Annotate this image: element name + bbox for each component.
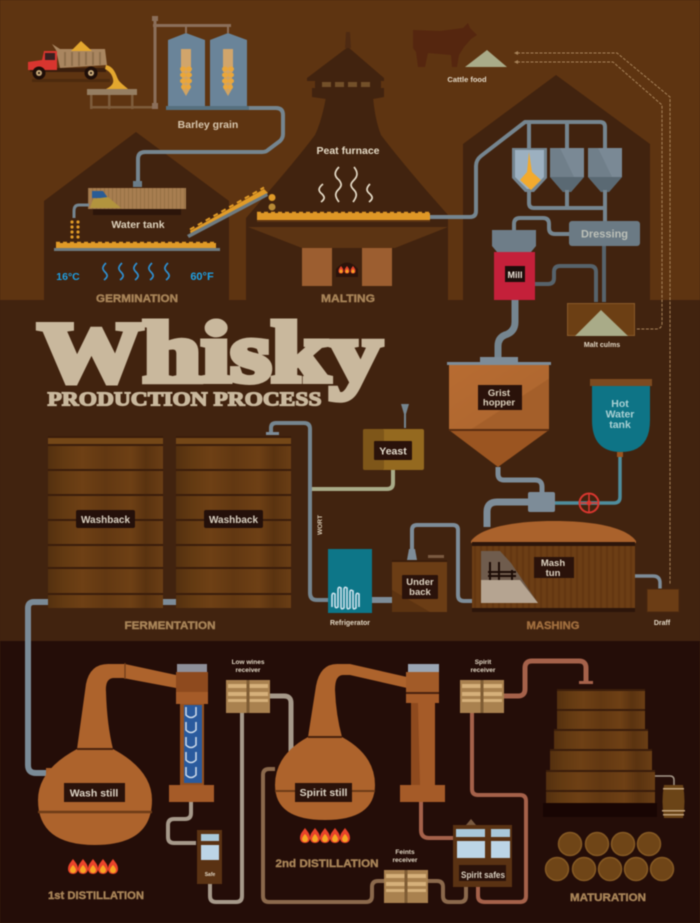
wheat icon [222,49,234,96]
dressing machine [569,221,640,246]
dressing machine: Dressing [581,228,628,240]
washback: right [176,436,291,608]
pipe: mash tun to draff [635,576,660,590]
germination heading: GERMINATION [96,293,178,305]
rear wheel [84,66,98,80]
hopper: active [512,148,547,192]
pipe: grist hopper to junction [498,467,542,493]
gap pillar between buildings [231,205,246,300]
pipe: mash tun to underback [412,525,473,601]
spirit receiver [460,680,504,713]
tank shadow [93,209,181,215]
smoke [319,167,372,202]
yeast tank [363,404,424,470]
grain pouring from truck [105,65,128,89]
pipe: spirit safes to spirit receiver [472,713,526,902]
maturation heading: MATURATION [570,892,646,904]
mashing heading: MASHING [526,620,580,632]
background: upper section [0,0,700,300]
spirit still [275,664,407,820]
pipe: spirit still to feints [263,769,384,902]
pipe: dressing to malt culms [602,246,606,302]
cab window [45,53,55,60]
pipe: mill to grist hopper [498,300,515,358]
feints receiver label: Feints [395,849,415,856]
draff label: Draff [654,620,671,627]
pipe: low wines to spirit still [270,696,291,752]
wheat icon [180,49,192,96]
falling grain [70,220,80,239]
tank nozzle [133,181,142,187]
spirit receiver label: Spirit [475,659,492,666]
malting building [246,32,448,300]
draff box [647,589,679,612]
furnace fire [336,262,358,277]
mill [492,230,536,300]
pagoda lower eave [312,88,384,99]
germination conveyor [54,242,220,251]
spirit safes: Spirit safes [461,870,505,880]
refrigerator [328,549,372,613]
hot water tank: tank [609,419,631,431]
silo base [166,106,249,110]
low wines receiver label [232,659,265,674]
dashed lines to cattle food [517,53,670,585]
grain dots [268,194,276,210]
hopper: right [588,148,622,192]
condenser: first [169,664,214,802]
pipe: wort to washback [271,423,328,600]
underback: Under [406,577,434,588]
cooling coil [332,587,359,609]
grain in tank [90,197,121,208]
pipe: spirit receiver to vat [504,661,586,696]
temperature: fahrenheit: 60°F [190,271,214,283]
low wines receiver label: Low wines [232,659,265,666]
wash still [38,663,176,845]
spirit still: Spirit still [300,787,348,799]
pagoda finial [345,32,351,48]
pipe: condenser to safe [168,802,196,843]
bed ribs [65,52,100,66]
furnace hood [248,227,448,248]
washback: left [48,436,163,608]
spirit safes [453,819,512,887]
pipe: condenser to spirit safes [421,802,454,838]
barrel [662,785,685,818]
malt culms label: Malt culms [584,342,620,349]
refrigerator label: Refrigerator [330,620,370,627]
cattle food label: Cattle food [447,75,487,84]
background: middle section [0,300,700,641]
temperature: celsius: 16°C [56,271,80,283]
pipe: vat to barrel [655,776,674,785]
elevator frame [152,16,231,109]
mash tun: tun [546,568,561,579]
red valve [580,494,598,512]
pipe: furnace to hoppers [430,122,605,217]
blue coil [184,705,202,783]
fermentation heading: FERMENTATION [124,620,216,632]
spirit receiver label [471,659,496,674]
pipe: mill to malt culms [535,266,596,302]
low wines receiver [226,680,270,713]
washback: left: Washback [81,515,130,526]
background: lower section [0,641,700,923]
loading table [87,89,155,109]
arrowheads [514,51,518,64]
condenser: second [400,664,445,802]
underback fittings [428,555,444,558]
malt culms box [568,304,634,336]
cow [413,23,477,67]
grist hopper: hopper [483,398,515,408]
pipe: hot water [555,454,620,503]
yeast tank: Yeast [379,446,407,458]
silo: right [210,27,247,106]
inclined conveyor [187,188,268,238]
barley grain label: Barley grain [178,119,238,131]
maturation vat [543,689,657,817]
feints receiver label [393,849,418,864]
safe: Safe [205,872,215,878]
pipe: silo to water tank [138,108,283,184]
hopper: middle [550,148,584,192]
mill: Mill [508,270,522,280]
mash tun cutaway [481,551,538,603]
underback [392,549,447,612]
malting floor conveyor [257,212,430,222]
pipe junction [528,492,555,512]
feints receiver [384,870,428,903]
pipe: washback to wash still [28,602,48,773]
hot water tank: Hot [611,398,629,410]
grist hopper: Grist [488,388,511,399]
milling building [463,75,650,300]
pipe: underback to refrigerator [372,597,393,603]
link between washbacks [163,599,176,605]
yeast funnel [401,404,409,428]
steam: blue [103,263,169,280]
rakes [488,562,516,580]
tank body [88,188,186,209]
flames: second [300,828,350,843]
cattle food pile [465,50,507,67]
malting heading: MALTING [321,293,375,305]
blue water fill [92,191,108,198]
peat furnace label: Peat furnace [316,145,380,157]
outlet pipe [74,205,89,218]
pagoda band [315,81,381,88]
underback: back [409,587,432,598]
truck [28,41,110,82]
safe [197,830,222,884]
washback: right: Washback [209,515,258,526]
mash tun: Mash [541,558,565,569]
front wheel [32,66,46,80]
hopper outlets [529,190,605,221]
flames: first [68,859,118,874]
grist hopper [447,357,551,467]
truck shadow [32,79,110,82]
subtitle: PRODUCTION PROCESS [48,388,322,410]
mash tun [471,521,636,612]
title main: Whisky [38,304,382,400]
vat shadow [543,803,657,817]
truck bed [52,44,107,68]
pipe: yeast to wort [312,469,393,489]
pipe: dressing to mill [514,218,569,234]
grain load [71,41,92,51]
silo: left [168,27,205,106]
wort label: WORT [317,515,324,535]
hopper feed pipes [529,122,567,148]
pipe: junction to mash tun [487,502,530,527]
wort nozzle [266,432,279,435]
wash still: Wash still [70,788,118,800]
mash tun dome [471,521,636,543]
hot water tank: Water [606,408,634,420]
title [38,304,382,410]
furnace body [246,97,448,300]
low wines receiver label: receiver [236,667,261,674]
truck cab [28,51,57,70]
first distillation heading: 1st DISTILLATION [48,890,144,902]
pagoda roof [307,47,384,81]
second distillation heading: 2nd DISTILLATION [276,858,379,870]
furnace brick: right [362,248,392,286]
hot water tank [590,379,652,457]
water tank label: Water tank [111,219,165,231]
truck chassis [30,68,106,72]
spirit receiver label: receiver [471,667,496,674]
stacked barrels [546,832,674,880]
water tank [88,181,186,215]
feints receiver label: receiver [393,857,418,864]
pipe: safe to low wines receiver [210,712,242,902]
pipe outlet [579,681,593,684]
germination building [44,132,229,300]
furnace brick: left [302,248,332,286]
pipe: feints to spirit safes [428,881,466,902]
